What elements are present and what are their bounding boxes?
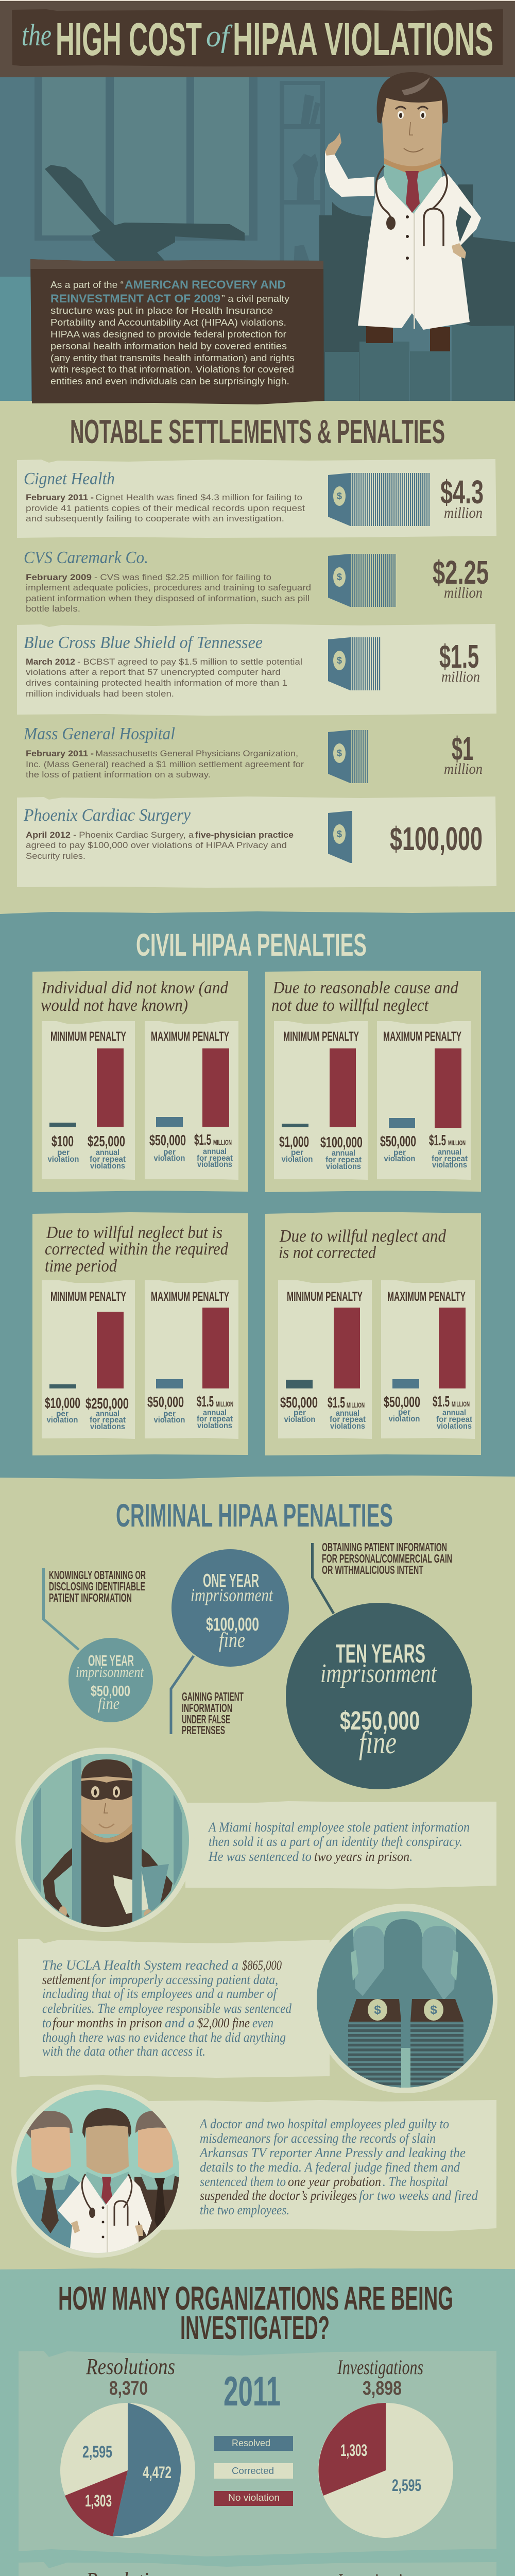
panel: reasonable cause: for repeat <box>432 1155 468 1163</box>
panel: willful neglect not corrected: $50,000 <box>384 1394 420 1411</box>
tier: one year, fifty thousand: KNOWINGLY OBTAINING OR <box>49 1568 146 1582</box>
panel: willful neglect corrected: per <box>163 1410 176 1418</box>
story: UCLA settlement: The UCLA Health System reached a <box>42 1958 238 1973</box>
panel: 2011: Investigations <box>337 2355 423 2379</box>
story: Miami employee: then sold it as a part of an identity theft conspiracy. <box>209 1834 462 1849</box>
intro text panel: structure was put in place for Health Insurance <box>50 306 273 316</box>
settlement: Cignet Health: and subsequently failing to cooperate with an investigation. <box>26 514 284 523</box>
section: how many organizations <box>0 2268 515 2576</box>
icon: cash stack: $ <box>337 572 342 582</box>
settlement: Mass General: Inc. (Mass General) reached a $1 million settlement agreement for <box>26 759 304 769</box>
story: Arkansas doctor: misdemeanors for accessing the records of slain <box>200 2131 436 2146</box>
panel: individual did not know: annual <box>96 1148 119 1157</box>
panel: 2011: 8,370 <box>109 2378 148 2399</box>
tier: one year, hundred thousand: fine <box>219 1629 245 1652</box>
legend 2011: No violation <box>228 2493 280 2503</box>
pie chart: investigations 2011: 2,595 <box>392 2476 421 2495</box>
intro text panel: REINVESTMENT ACT OF 2009 <box>50 292 220 305</box>
panel: willful neglect not corrected <box>265 1212 481 1455</box>
story: Arkansas doctor: one year probation <box>288 2174 381 2189</box>
story: Arkansas doctor <box>11 2084 496 2258</box>
settlement: Phoenix Cardiac: April 2012 <box>26 830 71 840</box>
settlement: Blue Cross Blue Shield: drives containing protected health information of more than 1 <box>26 678 287 688</box>
panel: willful neglect not corrected: Due to willful neglect and <box>279 1227 447 1246</box>
panel: willful neglect corrected: $50,000 <box>147 1394 184 1411</box>
bar chart: maximum <box>392 1308 466 1388</box>
panel: willful neglect corrected: MILLION <box>216 1400 233 1408</box>
panel: individual did not know: annual <box>203 1147 227 1156</box>
settlement: Phoenix Cardiac: Phoenix Cardiac Surgery <box>23 806 191 825</box>
settlement: Cignet Health <box>17 459 496 538</box>
settlement: Cignet Health: $4.3 <box>440 473 484 511</box>
story: Arkansas doctor: sentenced them to <box>200 2174 286 2189</box>
panel: willful neglect corrected: MINIMUM PENALTY <box>50 1290 126 1304</box>
story: UCLA settlement: $2,000 fine <box>197 2015 250 2030</box>
story: Arkansas doctor: the two employees. <box>200 2202 289 2217</box>
intro text panel: As a part of the “ <box>50 280 124 290</box>
settlement: Blue Cross Blue Shield: $1.5 <box>439 638 479 675</box>
illustration: money handover: $ <box>374 2003 381 2017</box>
bar chart: minimum <box>49 1312 124 1388</box>
pie chart: investigations 2011 <box>318 2403 453 2538</box>
settlement: Phoenix Cardiac: agreed to pay $100,000 over violations of HIPAA Privacy and <box>26 840 287 850</box>
tier: one year, fifty thousand: PATIENT INFORMATION <box>49 1591 132 1604</box>
panel: willful neglect not corrected: is not corrected <box>279 1243 376 1262</box>
settlement: CVS Caremark: patient information when they disposed of information, such as pill <box>26 594 310 603</box>
story: UCLA settlement: settlement <box>42 1972 91 1987</box>
bar chart: minimum <box>286 1308 360 1388</box>
tier: one year, hundred thousand: PRETENSES <box>182 1723 225 1737</box>
settlement: Phoenix Cardiac: Security rules. <box>26 851 85 861</box>
title: of <box>206 19 233 53</box>
intro text panel <box>30 259 324 404</box>
panel: willful neglect corrected: MAXIMUM PENALTY <box>151 1290 229 1304</box>
settlement: Cignet Health: Cignet Health was fined $4.3 million for failing to <box>95 493 302 502</box>
pie chart: resolutions 2011: 1,303 <box>85 2492 112 2510</box>
icon: cash stack: $ <box>337 655 342 666</box>
story: UCLA settlement: four months in prison <box>53 2015 162 2030</box>
settlement: Cignet Health: provide 41 patients copies of their medical records upon request <box>26 503 305 513</box>
panel: individual did not know: $50,000 <box>149 1132 186 1149</box>
panel: willful neglect corrected: annual <box>96 1410 119 1418</box>
illustration: thief behind bars <box>15 1748 195 1932</box>
panel: reasonable cause: annual <box>332 1149 355 1158</box>
panel: reasonable cause: MINIMUM PENALTY <box>283 1029 359 1044</box>
title: the <box>22 18 52 52</box>
panel: willful neglect corrected: Due to willful neglect but is <box>46 1223 222 1242</box>
tier: one year, hundred thousand <box>171 1549 289 1737</box>
intro text panel: personal health information held by covered entities <box>50 341 287 351</box>
panel: reasonable cause: $1.5 <box>429 1132 446 1149</box>
panel: reasonable cause: not due to willful neglect <box>271 996 429 1015</box>
panel: reasonable cause: annual <box>438 1148 461 1157</box>
panel: willful neglect not corrected: for repeat <box>436 1415 473 1424</box>
panel: reasonable cause: $1,000 <box>279 1134 309 1150</box>
story: Miami employee: A Miami hospital employee stole patient information <box>208 1820 470 1835</box>
intro text panel: (any entity that transmits health information) and rights <box>50 353 295 363</box>
panel: willful neglect not corrected: annual <box>442 1409 466 1417</box>
tier: one year, hundred thousand: UNDER FALSE <box>182 1713 230 1726</box>
panel: reasonable cause: per <box>291 1148 303 1157</box>
intro text panel: HIPAA was designed to provide federal protection for <box>50 329 286 340</box>
story: Arkansas doctor: details to the media. A federal judge fined them and <box>200 2160 460 2175</box>
story: Arkansas doctor: A doctor and two hospital employees pled guilty to <box>199 2116 449 2131</box>
settlement: Phoenix Cardiac <box>17 796 496 888</box>
tier: one year, fifty thousand: $50,000 <box>91 1683 130 1700</box>
panel: individual did not know: MILLION <box>213 1138 232 1146</box>
panel: willful neglect corrected: $250,000 <box>85 1396 129 1412</box>
panel: individual did not know: $1.5 <box>194 1132 211 1148</box>
intro text panel: entities and even individuals can be surprisingly high. <box>50 376 289 386</box>
heading: how many: INVESTIGATED? <box>180 2309 330 2346</box>
panel: willful neglect not corrected: violation <box>284 1415 315 1424</box>
panel: willful neglect corrected: violations <box>197 1421 232 1430</box>
panel: reasonable cause: MILLION <box>448 1139 466 1147</box>
story: Miami employee: two years in prison <box>314 1849 409 1864</box>
panel: willful neglect corrected: for repeat <box>197 1415 233 1423</box>
story: UCLA settlement: for improperly accessing patient data, <box>92 1972 278 1987</box>
hero office scene <box>0 72 515 401</box>
panel: willful neglect corrected: per <box>56 1410 68 1418</box>
panel: willful neglect corrected: for repeat <box>90 1416 126 1425</box>
pie chart: resolutions 2011: 4,472 <box>143 2463 171 2482</box>
panel: willful neglect not corrected: for repeat <box>330 1415 366 1424</box>
icon: cash stack <box>328 811 352 863</box>
panel: willful neglect not corrected: MILLION <box>452 1400 470 1408</box>
legend 2011 <box>214 2436 293 2506</box>
panel: individual did not know: violation <box>153 1154 185 1163</box>
settlement: Mass General: million <box>444 760 483 777</box>
story: UCLA settlement: with the data other than access it. <box>42 2044 205 2059</box>
tier: ten years: OR WITHMALICIOUS INTENT <box>322 1563 423 1577</box>
tier: one year, fifty thousand <box>43 1568 153 1722</box>
panel: willful neglect corrected: violations <box>90 1422 125 1431</box>
panel: 2011: Resolutions <box>85 2354 175 2379</box>
illustration: money handover: $ <box>430 2003 437 2017</box>
pie chart: resolutions 2011 <box>60 2403 195 2538</box>
settlement: Mass General <box>23 724 483 783</box>
tier: ten years <box>286 1540 472 1789</box>
panel: willful neglect corrected: corrected within the required <box>45 1240 229 1259</box>
panel: individual did not know: violations <box>90 1162 125 1171</box>
intro text panel: ” a civil penalty <box>221 294 289 304</box>
panel: willful neglect not corrected: MAXIMUM PENALTY <box>387 1290 466 1304</box>
settlement: Mass General: the loss of patient information on a subway. <box>26 770 211 779</box>
settlement: Blue Cross Blue Shield <box>17 624 496 716</box>
settlement: CVS Caremark: CVS Caremark Co. <box>24 548 148 567</box>
panel: reasonable cause: violations <box>326 1162 361 1171</box>
settlement: Blue Cross Blue Shield: million <box>441 668 480 685</box>
bar chart: maximum <box>389 1048 461 1128</box>
title: HIGH COST <box>56 14 202 65</box>
panel: willful neglect corrected: violation <box>46 1416 78 1425</box>
settlement: Mass General: February 2011 - <box>26 749 94 758</box>
panel: willful neglect not corrected: $50,000 <box>280 1395 318 1411</box>
panel: reasonable cause: violations <box>432 1161 467 1170</box>
story: Miami employee <box>15 1748 496 1932</box>
icon: cash stack <box>328 554 396 607</box>
tier: one year, hundred thousand: INFORMATION <box>182 1701 232 1715</box>
icon: cash stack <box>328 730 369 783</box>
settlement: Blue Cross Blue Shield: - BCBST agreed to pay $1.5 million to settle potential <box>77 657 302 667</box>
panel: individual did not know: per <box>163 1148 176 1157</box>
tier: ten years: TEN YEARS <box>336 1639 425 1668</box>
heading: how many <box>58 2280 453 2346</box>
panel: individual did not know: for repeat <box>90 1155 126 1164</box>
panel: willful neglect not corrected: violations <box>437 1422 472 1431</box>
icon: cash stack: $ <box>337 829 342 839</box>
panel: willful neglect not corrected: per <box>294 1409 306 1417</box>
panel: individual did not know: MINIMUM PENALTY <box>50 1029 126 1044</box>
boxes <box>325 322 514 401</box>
title <box>22 14 493 65</box>
tier: one year, hundred thousand: GAINING PATIENT <box>182 1690 244 1703</box>
panel: willful neglect not corrected: MILLION <box>347 1401 365 1409</box>
settlement: CVS Caremark: implement adequate policies, procedures and training to safeguard <box>26 583 311 592</box>
panel: willful neglect not corrected: per <box>398 1408 410 1417</box>
panel: 2011: 3,898 <box>363 2378 402 2399</box>
icon: cash stack <box>328 637 381 690</box>
sofa <box>319 184 515 401</box>
settlement: Phoenix Cardiac: five-physician practice <box>195 830 294 840</box>
story: UCLA settlement: though there was no evidence that he did anything <box>42 2030 286 2045</box>
section: civil HIPAA penalties <box>0 911 515 1479</box>
settlement: Mass General: $1 <box>452 730 473 767</box>
story: Miami employee: . <box>409 1849 413 1864</box>
story: UCLA settlement <box>18 1904 505 2093</box>
settlement: CVS Caremark: million <box>444 584 483 601</box>
tier: one year, fifty thousand: ONE YEAR <box>88 1653 134 1669</box>
settlement: Blue Cross Blue Shield: million individuals had been stolen. <box>26 689 174 699</box>
settlement: Blue Cross Blue Shield: Blue Cross Blue Shield of Tennessee <box>24 633 263 652</box>
intro text panel: with respect to that information. Violations for covered <box>50 364 294 375</box>
story: Arkansas doctor: for two weeks and fired <box>359 2188 478 2203</box>
story: UCLA settlement: $865,000 <box>242 1958 282 1973</box>
panel: willful neglect not corrected: annual <box>336 1409 359 1418</box>
settlement: CVS Caremark: bottle labels. <box>26 604 80 614</box>
exam chair <box>45 165 245 264</box>
doctor <box>325 72 481 351</box>
tier: one year, fifty thousand: imprisonment <box>76 1664 144 1681</box>
settlement: Blue Cross Blue Shield: violations after a report that 57 unencrypted computer hard <box>26 667 281 677</box>
settlement: CVS Caremark: February 2009 <box>26 572 92 582</box>
tier: one year, hundred thousand: $100,000 <box>206 1614 259 1635</box>
panel: willful neglect not corrected: $1.5 <box>328 1395 345 1411</box>
bar chart: minimum <box>49 1048 124 1127</box>
window <box>35 77 258 241</box>
settlement: Phoenix Cardiac: - Phoenix Cardiac Surgery, a <box>73 830 194 840</box>
panel: reasonable cause: violation <box>281 1155 313 1164</box>
story: UCLA settlement: and a <box>165 2015 195 2030</box>
illustration: money handover <box>309 1904 505 2093</box>
icon: cash stack: $ <box>337 748 342 758</box>
panel: reasonable cause: Due to reasonable cause and <box>272 978 459 997</box>
legend 2011: Resolved <box>232 2438 270 2448</box>
panel: 2011 <box>19 2351 496 2556</box>
settlement: Blue Cross Blue Shield: March 2012 <box>26 657 75 667</box>
story: UCLA settlement: celebrities. The employee responsible was sentenced <box>42 2001 292 2016</box>
intro text panel: AMERICAN RECOVERY AND <box>125 278 286 291</box>
panel: willful neglect corrected: annual <box>203 1409 227 1417</box>
pie chart: resolutions 2011: 2,595 <box>82 2443 112 2461</box>
tier: ten years: $250,000 <box>340 1706 420 1735</box>
settlement: Cignet Health: Cignet Health <box>24 469 115 488</box>
panel: willful neglect not corrected: violation <box>388 1415 420 1423</box>
tier: ten years: fine <box>359 1725 397 1760</box>
bar chart: maximum <box>156 1308 229 1388</box>
icon: cash stack <box>328 473 431 526</box>
tier: one year, fifty thousand: DISCLOSING IDENTIFIABLE <box>49 1580 145 1593</box>
story: UCLA settlement: to <box>42 2015 52 2030</box>
illustration: doctor and two employees <box>11 2084 185 2258</box>
settlement: CVS Caremark <box>24 548 489 614</box>
bar chart: maximum <box>156 1048 229 1127</box>
heading: civil: CIVIL HIPAA PENALTIES <box>136 927 367 962</box>
header banner <box>0 0 515 77</box>
panel: individual did not know: violations <box>197 1160 232 1169</box>
panel: reasonable cause: violation <box>384 1155 415 1163</box>
settlement: CVS Caremark: - CVS was fined $2.25 million for failing to <box>94 572 271 582</box>
intro text panel: Portability and Accountability Act (HIPAA) violations. <box>50 317 286 328</box>
panel: individual did not know: violation <box>47 1155 79 1164</box>
panel: willful neglect corrected: violation <box>153 1416 185 1425</box>
bookshelf <box>280 81 325 272</box>
tier: one year, fifty thousand: fine <box>98 1694 119 1713</box>
story: Arkansas doctor: suspended the doctor’s privileges <box>200 2188 357 2203</box>
story: Arkansas doctor: . The hospital <box>383 2174 448 2189</box>
panel: individual did not know <box>32 971 248 1192</box>
panel: willful neglect corrected: $10,000 <box>45 1395 80 1412</box>
tier: one year, hundred thousand: imprisonment <box>191 1585 273 1605</box>
panel: individual did not know: would not have known) <box>41 996 188 1015</box>
legend 2011: Corrected <box>232 2466 274 2476</box>
panel: individual did not know: per <box>57 1148 70 1157</box>
pie chart: investigations 2011: 1,303 <box>340 2441 367 2460</box>
panel: individual did not know: $100 <box>52 1133 74 1150</box>
panel: reasonable cause <box>265 971 481 1192</box>
panel: reasonable cause: $50,000 <box>380 1133 416 1150</box>
settlement: Cignet Health: million <box>444 504 483 521</box>
story: UCLA settlement: including that of its employees and a number of <box>42 1986 278 2001</box>
panel: willful neglect not corrected: $1.5 <box>433 1394 450 1410</box>
panel: willful neglect corrected: time period <box>45 1257 117 1276</box>
panel: 2010 <box>19 2562 496 2576</box>
panel: willful neglect not corrected: MINIMUM PENALTY <box>287 1290 363 1304</box>
panel: reasonable cause: $100,000 <box>320 1134 363 1151</box>
panel: reasonable cause: for repeat <box>325 1156 362 1164</box>
panel: individual did not know: for repeat <box>197 1154 233 1163</box>
panel: reasonable cause: per <box>393 1148 406 1157</box>
panel: individual did not know: MAXIMUM PENALTY <box>151 1029 229 1044</box>
panel: willful neglect corrected <box>32 1212 248 1455</box>
tier: one year, hundred thousand: ONE YEAR <box>203 1570 259 1591</box>
story: Miami employee: He was sentenced to <box>208 1849 312 1864</box>
icon: cash stack: $ <box>337 491 342 501</box>
panel: 2011: 2011 <box>224 2368 281 2415</box>
panel: willful neglect corrected: $1.5 <box>197 1394 214 1410</box>
settlement: Mass General: Massachusetts General Physicians Organization, <box>95 749 298 758</box>
tier: ten years: imprisonment <box>320 1659 437 1688</box>
settlement: CVS Caremark: $2.25 <box>433 554 489 591</box>
panel: willful neglect not corrected: violations <box>330 1422 365 1431</box>
story: Arkansas doctor: Arkansas TV reporter Anne Pressly and leaking the <box>199 2145 466 2160</box>
panel: reasonable cause: MAXIMUM PENALTY <box>383 1029 461 1044</box>
settlement: Cignet Health: February 2011 - <box>26 493 94 502</box>
bar chart: minimum <box>282 1048 356 1127</box>
story: UCLA settlement: even <box>252 2015 273 2030</box>
panel: individual did not know: $25,000 <box>88 1133 125 1150</box>
settlement: Mass General: Mass General Hospital <box>23 724 175 743</box>
panel: individual did not know: Individual did not know (and <box>41 978 229 997</box>
